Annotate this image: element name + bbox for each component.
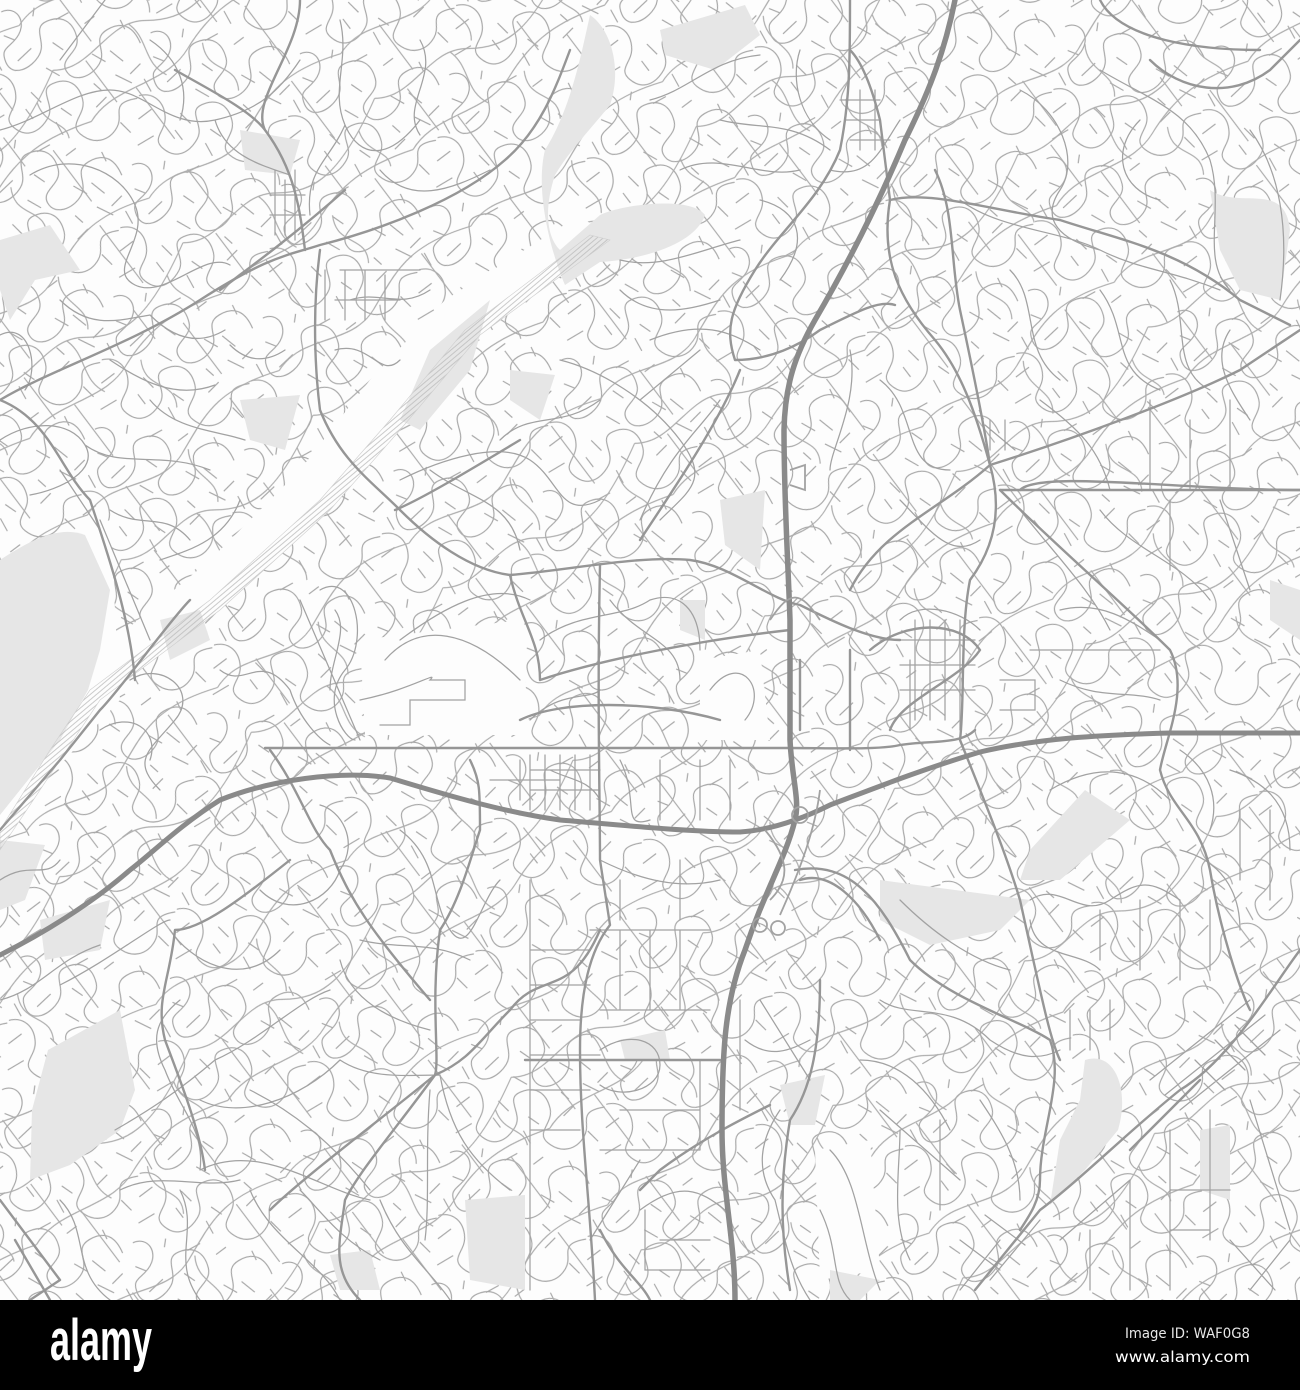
north-west neighbourhoods — [0, 0, 490, 530]
image id: Image ID: WAF0G8 — [1125, 1326, 1250, 1342]
lake: south-east — [1050, 1058, 1122, 1205]
park: north central — [660, 5, 760, 70]
footer band — [0, 1300, 1300, 1390]
highway: east-west interstate — [0, 733, 1300, 955]
lake: west large — [0, 532, 110, 815]
logo: alamy: alamy — [50, 1308, 152, 1373]
park: east lake — [1210, 190, 1290, 300]
west central — [0, 500, 600, 880]
east neighbourhoods — [830, 70, 1290, 930]
highway: north-south interstate — [722, 0, 955, 1300]
north central — [620, 50, 900, 350]
river hatching — [0, 235, 610, 850]
lake: north river lake — [542, 15, 705, 285]
south-east neighbourhoods — [820, 885, 1290, 1300]
interchange ramps — [753, 465, 820, 935]
open clearings — [0, 215, 880, 1280]
south-west — [0, 805, 510, 1300]
website: www.alamy.com — [1115, 1348, 1250, 1366]
south central — [530, 880, 810, 1300]
central neighbourhoods — [400, 350, 754, 920]
lake: south-west — [30, 1010, 135, 1180]
